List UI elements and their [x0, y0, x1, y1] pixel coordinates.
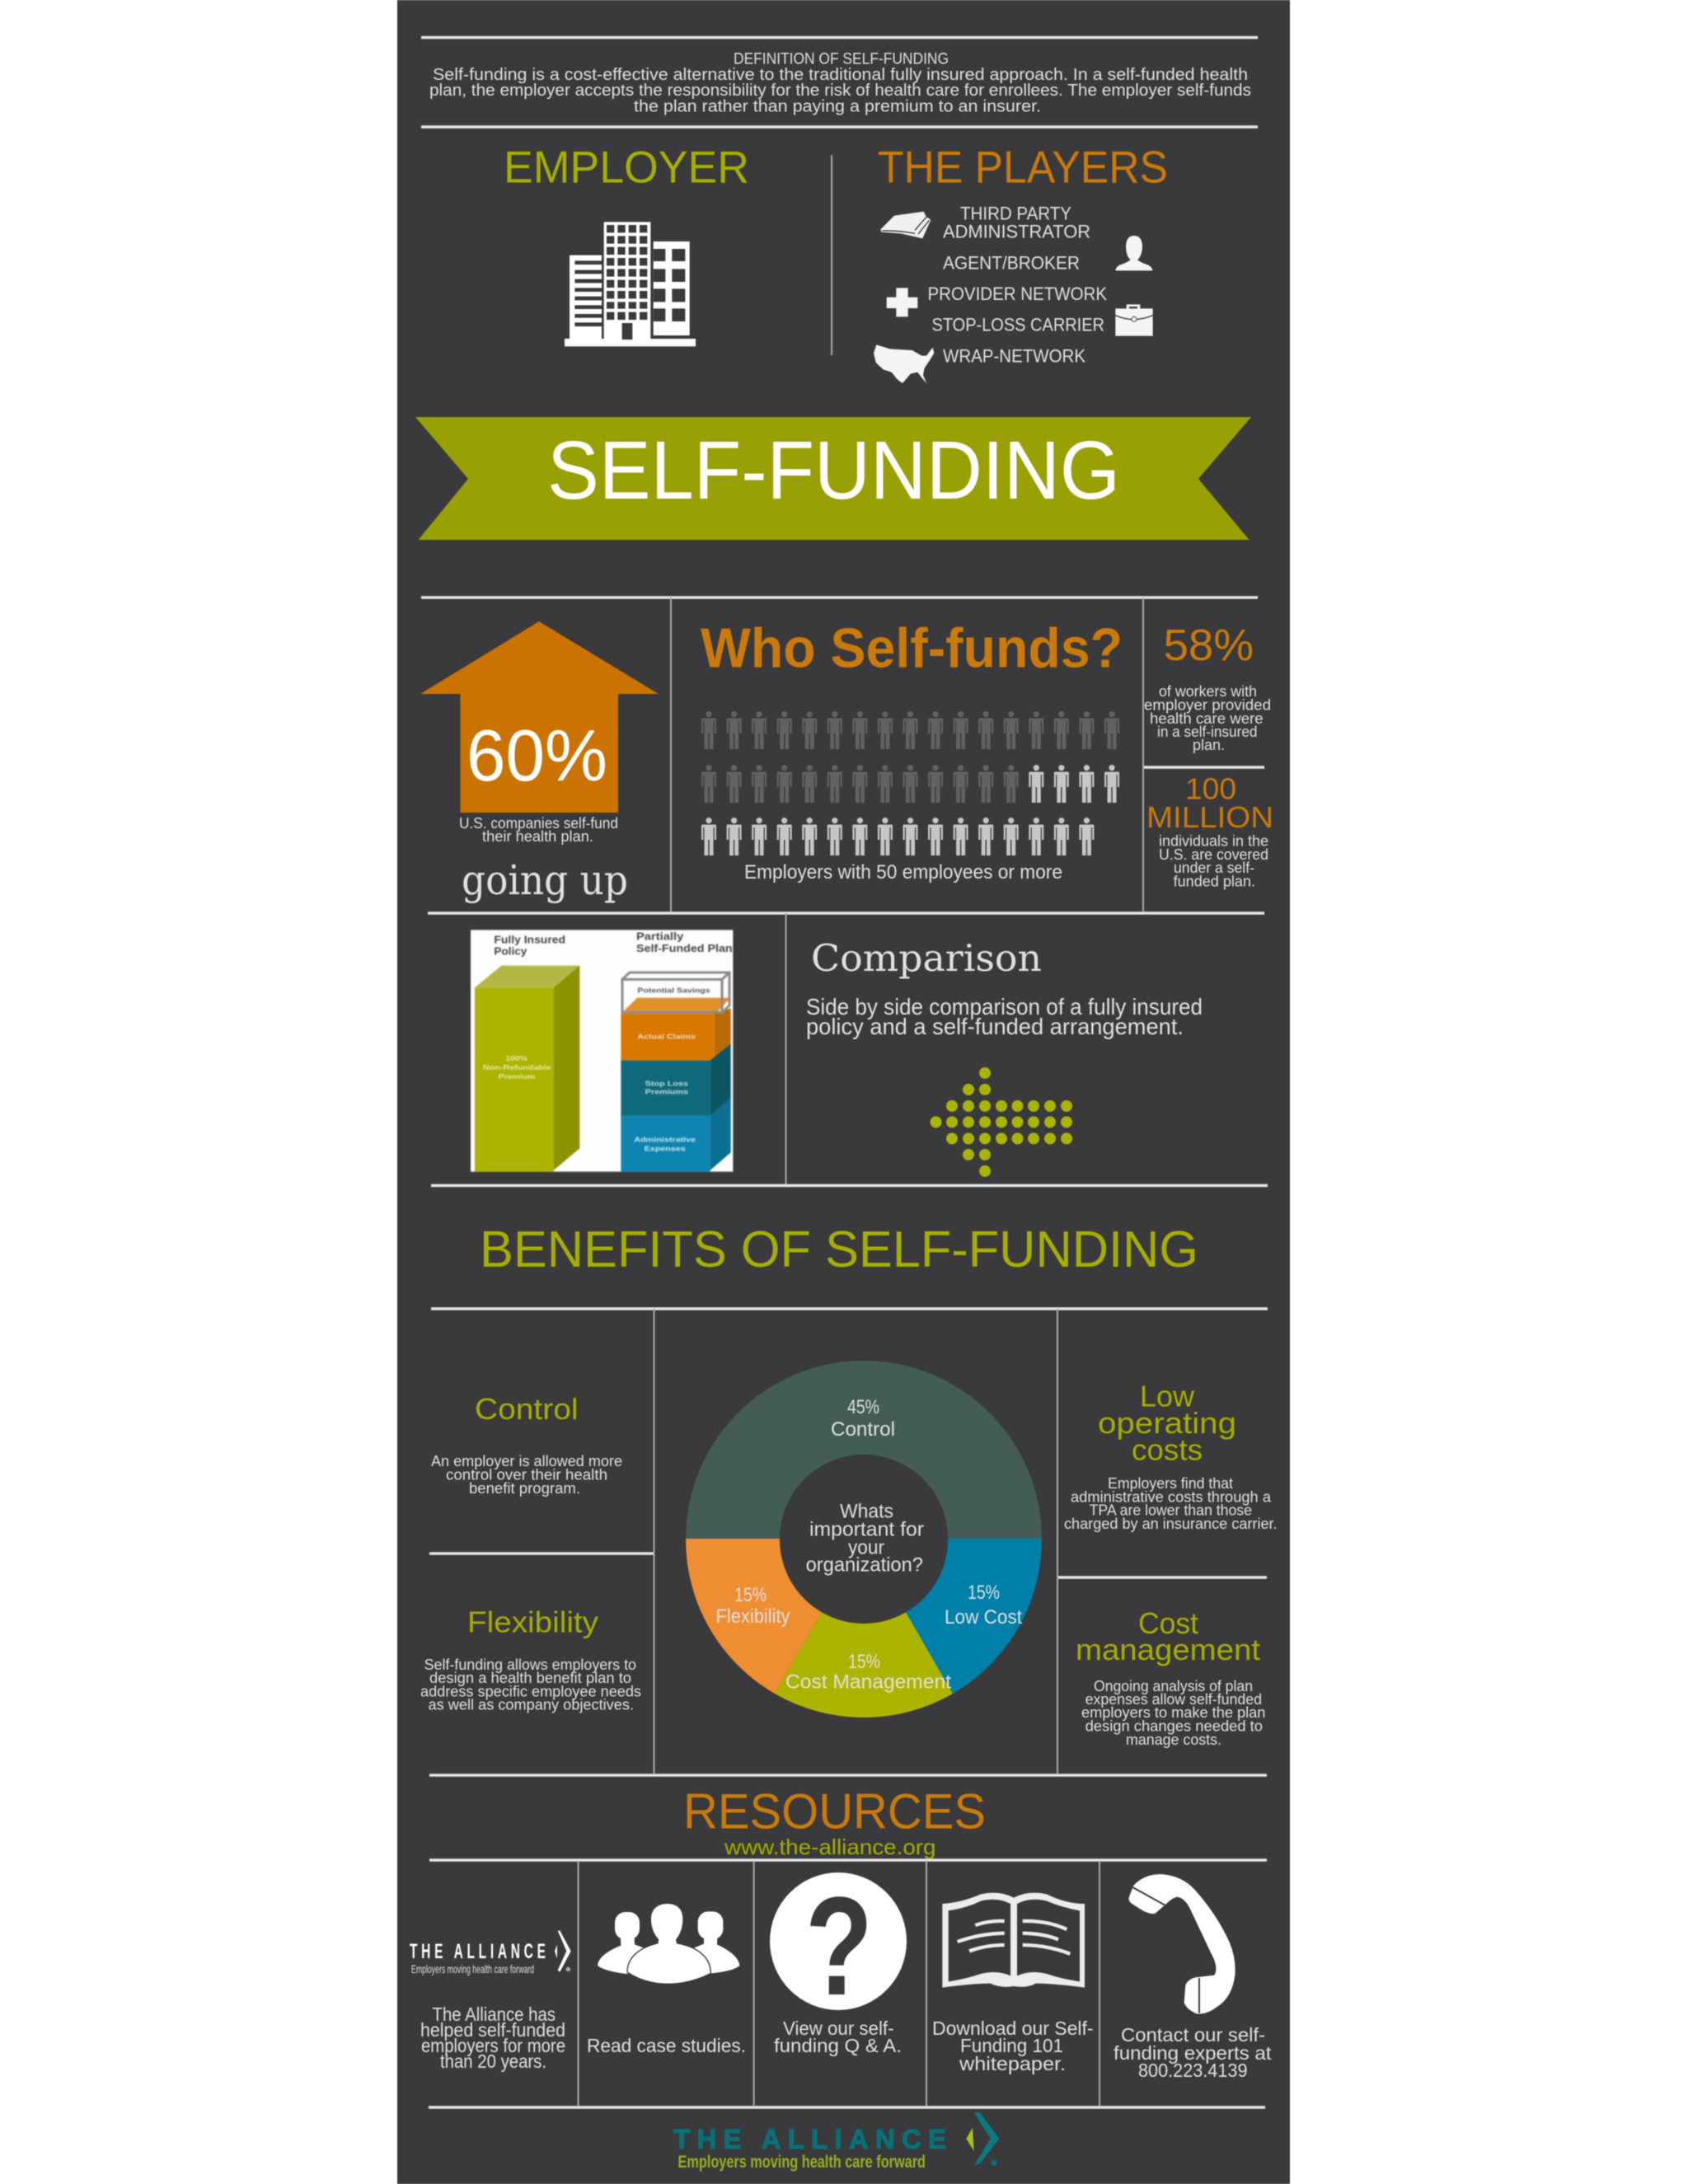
- icon: open book: [942, 1893, 1085, 1988]
- benefit: cost management: Cost: [1138, 1606, 1198, 1640]
- stat: 100 million: 100: [1185, 771, 1236, 806]
- resource: case studies: [587, 1904, 746, 2056]
- chart: donut what's important: Whats: [840, 1500, 893, 1523]
- benefit: control: benefit program.: [469, 1480, 580, 1497]
- divider rules: [421, 38, 1268, 2107]
- resource: case studies: Read case studies.: [587, 2035, 746, 2056]
- resource: alliance description: [420, 2004, 565, 2072]
- chart: fully insured vs partially self-funded comparison: Administrative: [634, 1136, 696, 1144]
- chart: fully insured vs partially self-funded comparison: Stop Loss: [645, 1079, 688, 1087]
- chart: donut what's important: Control: [831, 1418, 895, 1441]
- benefit: low operating costs: charged by an insurance carrier.: [1064, 1516, 1278, 1532]
- logo: the alliance white: Employers moving health care forward: [411, 1962, 534, 1975]
- text block: definition of self-funding: [429, 51, 1251, 115]
- stat: 100 million: U.S. are covered: [1159, 846, 1268, 863]
- benefit: low operating costs: operating: [1098, 1406, 1236, 1440]
- chart: people pictogram: Employers with 50 employees or more: [744, 861, 1062, 883]
- resource: whitepaper: Download our Self-: [932, 2018, 1094, 2039]
- chart: fully insured vs partially self-funded comparison: Self-Funded Plan: [636, 943, 733, 954]
- chart: fully insured vs partially self-funded comparison: Premiums: [645, 1087, 688, 1095]
- logo: the alliance white: [410, 1931, 571, 1975]
- benefit: cost management: expenses allow self-funded: [1085, 1691, 1262, 1708]
- banner: self-funding: [415, 417, 1251, 540]
- chart: fully insured vs partially self-funded comparison: Actual Claims: [637, 1033, 696, 1041]
- resource: whitepaper: whitepaper.: [959, 2053, 1066, 2074]
- chart: donut what's important: important for: [809, 1518, 924, 1541]
- resource: contact: 800.223.4139: [1138, 2060, 1248, 2081]
- stat: 58%: employer provided: [1144, 697, 1271, 714]
- logo: the alliance white: THE ALLIANCE: [410, 1940, 546, 1963]
- stat: 58%: 58%: [1164, 621, 1254, 670]
- banner: self-funding: SELF-FUNDING: [547, 424, 1120, 517]
- stat: 60% up arrow: going up: [462, 856, 628, 904]
- stat: 100 million: [1146, 771, 1273, 890]
- resource: whitepaper: Funding 101: [960, 2035, 1063, 2056]
- benefit: low operating costs: [1064, 1380, 1278, 1532]
- benefit: low operating costs: Employers find that: [1108, 1475, 1233, 1492]
- text block: definition of self-funding: plan, the employer accepts the responsibility for the risk of health care for enrollees. The employer self-funds: [429, 82, 1251, 100]
- text block: definition of self-funding: the plan rather than paying a premium to an insurer.: [634, 97, 1041, 115]
- text block: definition of self-funding: Self-funding is a cost-effective alternative to the traditional fully insured approach. In a self-funded health: [433, 66, 1248, 84]
- benefit: cost management: employers to make the plan: [1081, 1704, 1265, 1721]
- icon: briefcase: [1115, 304, 1153, 336]
- chart: donut what's important: your: [848, 1536, 884, 1559]
- benefit: flexibility: [420, 1605, 641, 1713]
- list: the players: STOP-LOSS CARRIER: [931, 315, 1104, 335]
- resource: contact: funding experts at: [1114, 2042, 1272, 2064]
- heading: who self-funds: Who Self-funds?: [701, 616, 1123, 679]
- text block: comparison: Comparison: [811, 936, 1042, 980]
- icon: group of people: [598, 1904, 739, 1984]
- logo: the alliance colour footer: THE ALLIANCE: [673, 2124, 946, 2154]
- chart: donut what's important: [686, 1361, 1042, 1718]
- resource: q and a: [770, 1868, 907, 2056]
- stat: 100 million: funded plan.: [1174, 874, 1255, 890]
- stat: 58%: in a self-insured: [1157, 724, 1258, 740]
- stat: 100 million: under a self-: [1174, 860, 1254, 876]
- panel: dark background: [397, 0, 1290, 2184]
- benefit: low operating costs: costs: [1132, 1432, 1203, 1467]
- stat: 60% up arrow: U.S. companies self-fund: [459, 815, 618, 832]
- benefit: flexibility: as well as company objectives.: [429, 1696, 634, 1713]
- benefit: low operating costs: Low: [1140, 1380, 1195, 1413]
- icon: plus: [887, 288, 917, 316]
- heading: the players: THE PLAYERS: [878, 142, 1168, 193]
- chart: fully insured vs partially self-funded comparison: 100%: [505, 1054, 528, 1062]
- resource: alliance description: The Alliance has: [432, 2004, 556, 2025]
- stat: 58%: health care were: [1150, 710, 1264, 727]
- resource: alliance description: employers for more: [421, 2035, 565, 2056]
- heading: benefits of self-funding: BENEFITS OF SELF-FUNDING: [480, 1221, 1198, 1278]
- chart: donut what's important: Flexibility: [715, 1605, 790, 1628]
- list: the players: ADMINISTRATOR: [943, 221, 1090, 242]
- resource: alliance description: than 20 years.: [440, 2050, 546, 2072]
- chart: donut what's important: Cost Management: [785, 1671, 951, 1693]
- text block: definition of self-funding: DEFINITION OF SELF-FUNDING: [734, 51, 949, 68]
- chart: people pictogram: [701, 711, 1119, 883]
- chart: fully insured vs partially self-funded comparison: Potential Savings: [637, 987, 710, 995]
- heading: resources: RESOURCES: [683, 1783, 986, 1840]
- list: the players: THIRD PARTY: [960, 203, 1071, 224]
- icon: papers: [880, 212, 931, 238]
- benefit: control: [431, 1392, 622, 1497]
- heading: employer: EMPLOYER: [504, 142, 749, 193]
- stat: 58%: plan.: [1193, 737, 1225, 753]
- stat: 58%: of workers with: [1159, 683, 1257, 700]
- resource: q and a: funding Q & A.: [774, 2035, 902, 2056]
- chart: fully insured vs partially self-funded comparison: Non-Refundable: [483, 1063, 551, 1071]
- list: the players: [874, 203, 1153, 383]
- benefit: cost management: Ongoing analysis of plan: [1094, 1678, 1253, 1694]
- benefit: control: Control: [475, 1392, 579, 1426]
- text block: comparison: [806, 936, 1203, 1039]
- stat: 60% up arrow: 60%: [467, 715, 607, 796]
- benefit: cost management: design changes needed to: [1085, 1718, 1263, 1734]
- logo: the alliance colour footer: Employers moving health care forward: [678, 2153, 926, 2172]
- chart: donut what's important: 15%: [848, 1651, 880, 1673]
- benefit: cost management: [1076, 1606, 1265, 1748]
- benefit: flexibility: Self-funding allows employers to: [424, 1657, 636, 1673]
- icon: question mark: ?: [805, 1868, 873, 2025]
- chart: fully insured vs partially self-funded comparison: Premium: [499, 1072, 536, 1080]
- icon: telephone handset: [1129, 1874, 1236, 2014]
- stat: 100 million: MILLION: [1146, 800, 1273, 834]
- icon: question mark: [770, 1868, 907, 2025]
- chart: donut what's important: 15%: [734, 1584, 767, 1606]
- list: the players: PROVIDER NETWORK: [928, 284, 1107, 304]
- chart: fully insured vs partially self-funded comparison: [471, 930, 733, 1172]
- logo: the alliance colour footer: [673, 2112, 999, 2172]
- chart: fully insured vs partially self-funded comparison: Partially: [636, 930, 683, 942]
- resource: contact: Contact our self-: [1121, 2024, 1265, 2046]
- benefit: flexibility: address specific employee needs: [420, 1683, 641, 1699]
- resource: alliance description: helped self-funded: [420, 2019, 565, 2041]
- chart: donut what's important: Low Cost: [945, 1606, 1022, 1629]
- benefit: cost management: manage costs.: [1126, 1732, 1221, 1748]
- stat: 60% up arrow: their health plan.: [482, 828, 593, 845]
- benefit: flexibility: Flexibility: [467, 1605, 598, 1638]
- resource: contact: [1114, 1874, 1272, 2081]
- chart: donut what's important: organization?: [806, 1554, 923, 1576]
- chart: fully insured vs partially self-funded comparison: Fully Insured: [494, 934, 565, 945]
- chart: fully insured vs partially self-funded comparison: Expenses: [645, 1144, 686, 1152]
- icon: office buildings: [565, 222, 696, 346]
- chart: donut what's important: 45%: [847, 1396, 879, 1418]
- icon: map of usa: [874, 344, 934, 383]
- resource: q and a: View our self-: [783, 2018, 893, 2039]
- benefit: low operating costs: TPA are lower than those: [1090, 1502, 1252, 1518]
- benefit: cost management: management: [1076, 1633, 1260, 1666]
- chart: donut what's important: 15%: [968, 1582, 1000, 1604]
- benefit: control: An employer is allowed more: [431, 1453, 622, 1469]
- list: the players: WRAP-NETWORK: [943, 346, 1085, 366]
- text block: comparison: Side by side comparison of a fully insured: [806, 994, 1203, 1019]
- stat: 100 million: individuals in the: [1159, 832, 1268, 849]
- icon: dotted left arrow: [930, 1067, 1072, 1177]
- text block: comparison: policy and a self-funded arrangement.: [806, 1014, 1184, 1039]
- link: website: www.the-alliance.org: [724, 1835, 936, 1859]
- chart: fully insured vs partially self-funded comparison: Policy: [494, 946, 527, 958]
- resource: whitepaper: [932, 1893, 1094, 2074]
- benefit: low operating costs: administrative costs through a: [1071, 1488, 1272, 1505]
- stat: 60% up arrow: [420, 621, 659, 904]
- benefit: control: control over their health: [446, 1467, 607, 1483]
- icon: person: [1115, 236, 1152, 270]
- benefit: flexibility: design a health benefit plan to: [429, 1670, 631, 1686]
- stat: 58%: [1144, 621, 1271, 753]
- list: the players: AGENT/BROKER: [943, 252, 1080, 274]
